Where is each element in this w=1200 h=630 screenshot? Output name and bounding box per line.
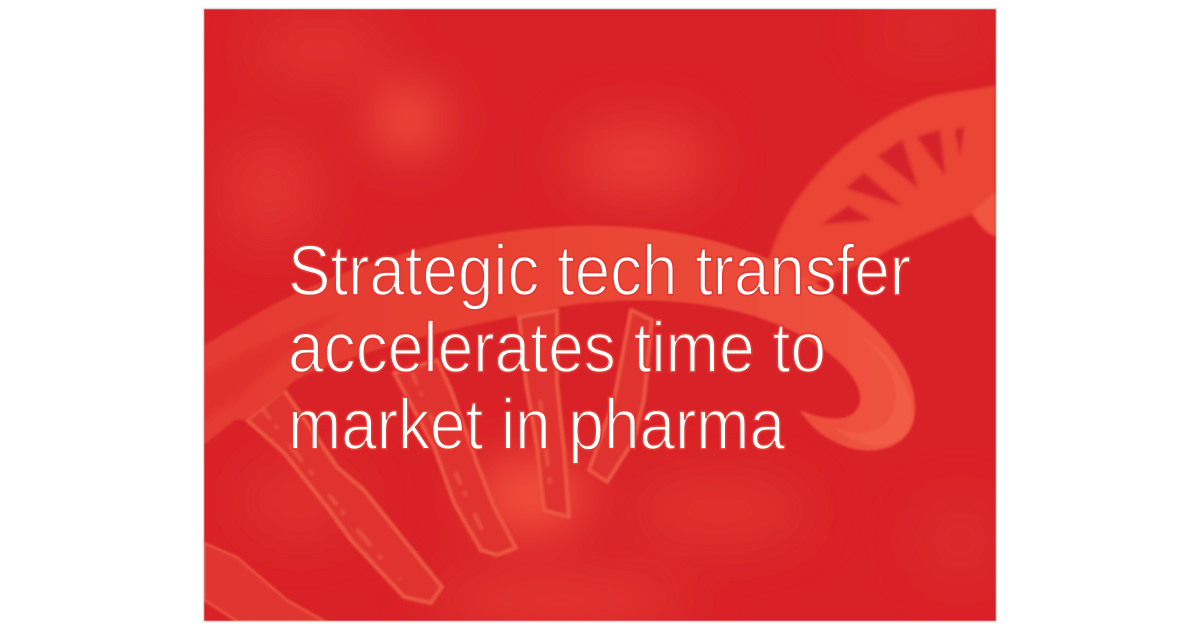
infographic canvas (202, 8, 998, 622)
icon: lower left strand fragment (204, 543, 326, 622)
strand rungs (247, 310, 652, 603)
title: accelerates time to (288, 309, 826, 388)
icon: main DNA strand (204, 226, 915, 603)
helix dark gaps (822, 127, 964, 224)
rung speckles (262, 372, 552, 580)
strand body (204, 226, 915, 451)
background glow blobs (222, 18, 790, 620)
title: Strategic tech transfer (288, 232, 911, 311)
title: market in pharma (288, 386, 785, 465)
title (288, 232, 911, 465)
icon: upper right DNA helix (768, 85, 996, 285)
panel border (204, 8, 996, 622)
panel: red DNA background (204, 8, 1000, 626)
